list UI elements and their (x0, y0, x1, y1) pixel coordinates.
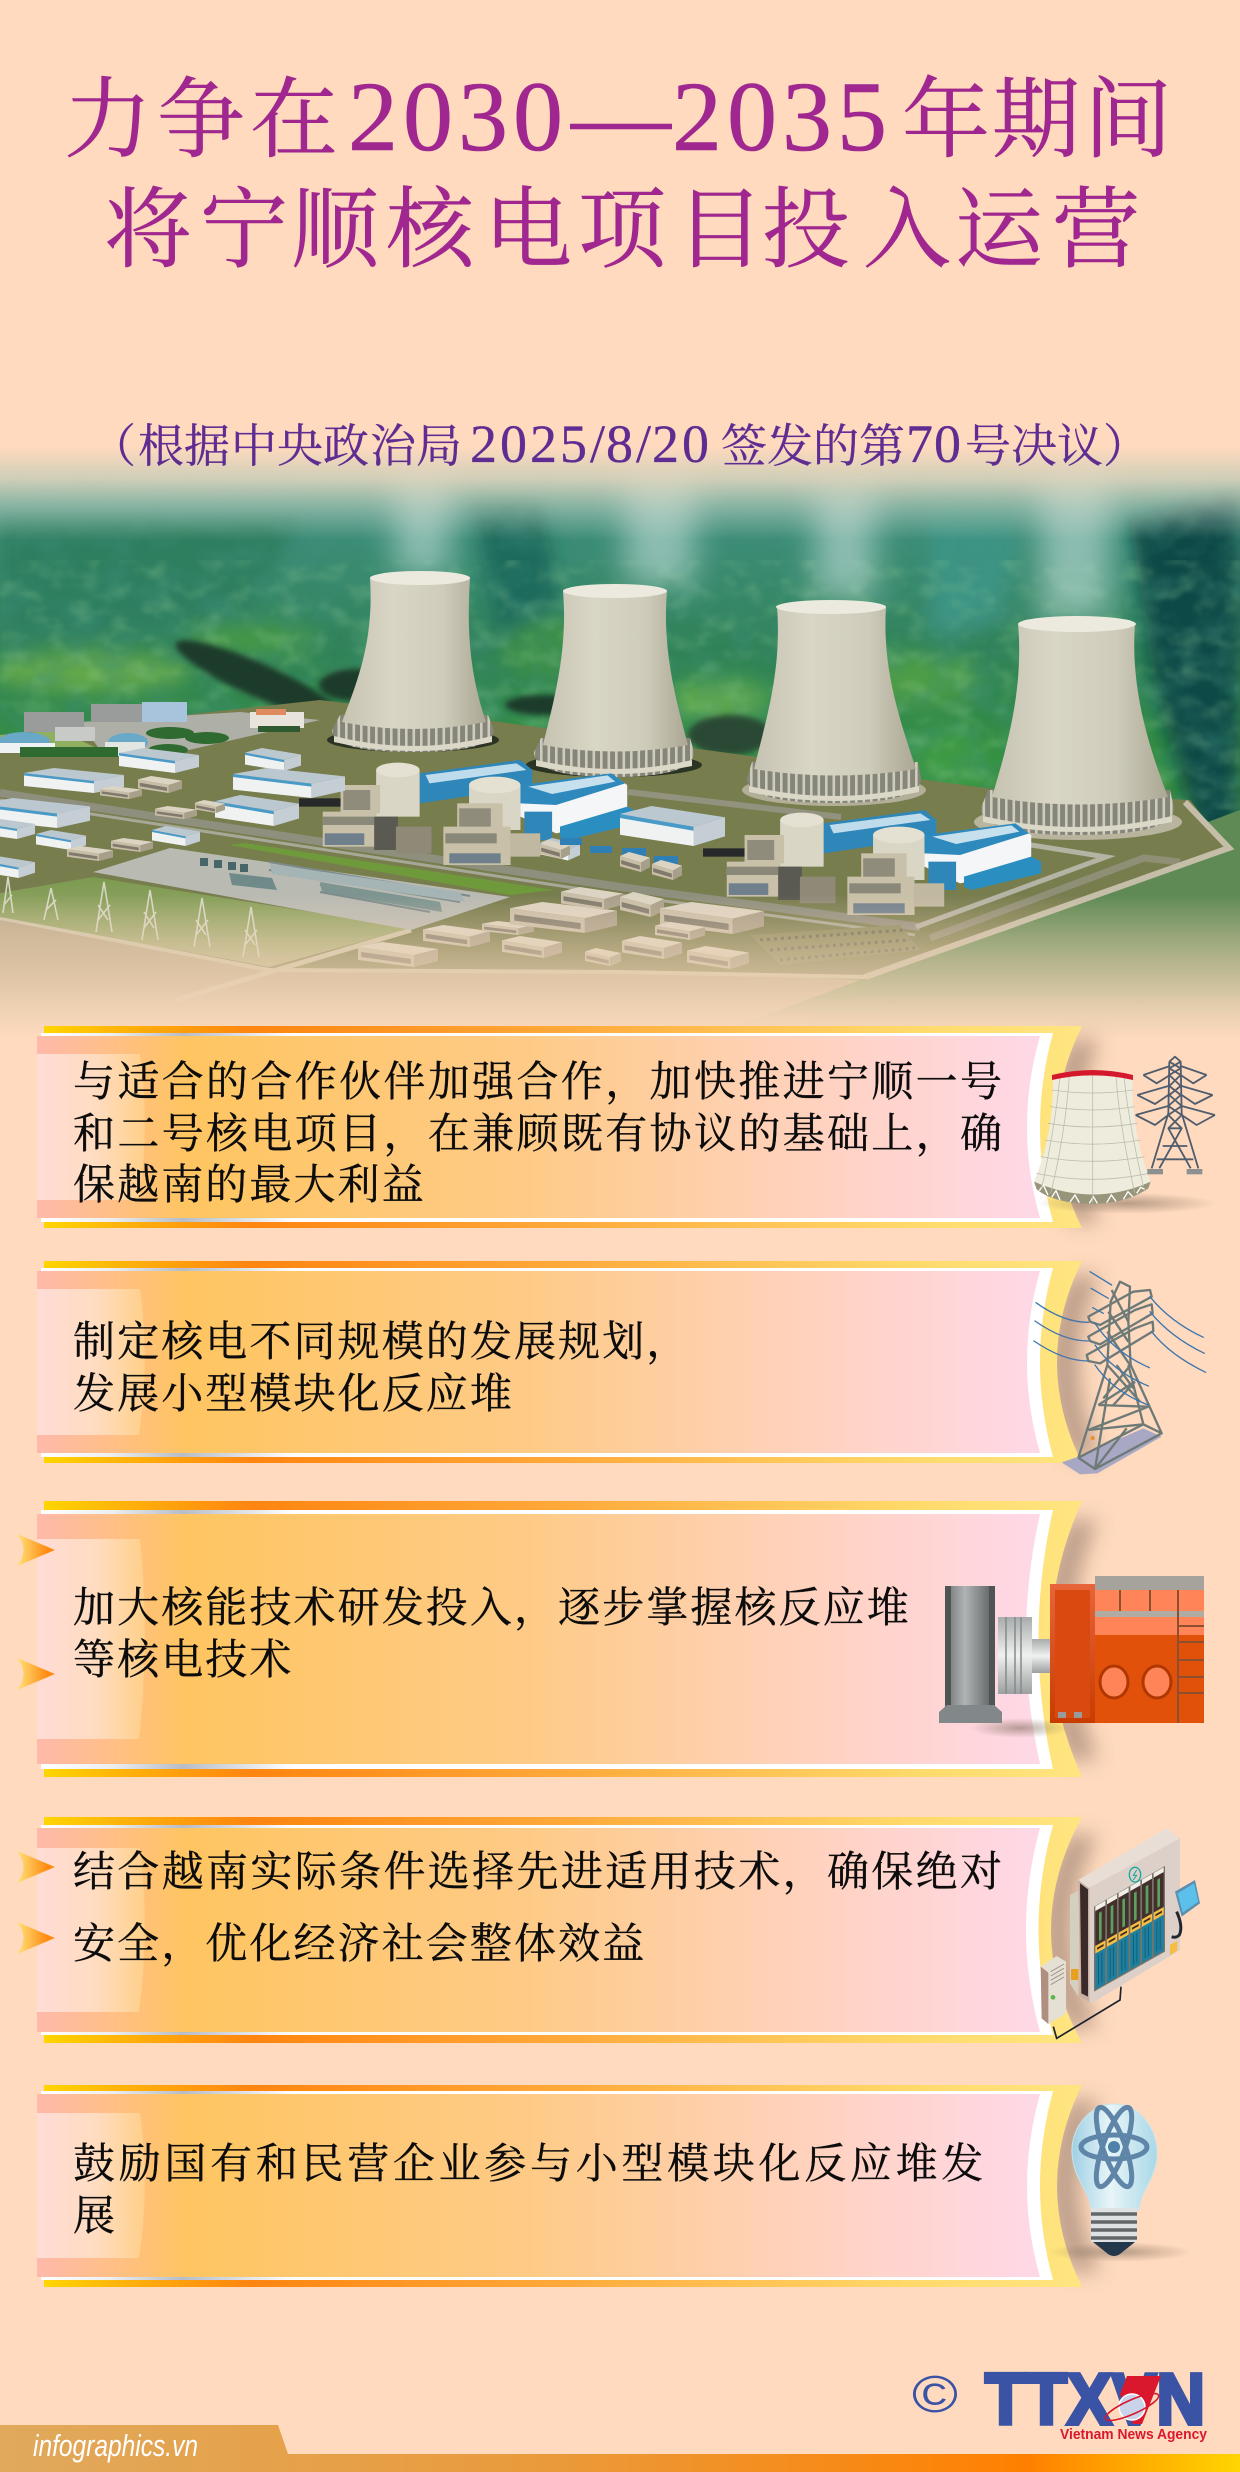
panel 3 text: 等核电技术 (73, 1627, 294, 1687)
lower left slope (0, 917, 860, 1008)
plant ground (0, 700, 1229, 977)
panel 2 text (73, 1309, 690, 1421)
title: 力争在 (64, 50, 338, 176)
icon: generator (939, 1576, 1204, 1738)
reactor buildings (703, 810, 1041, 915)
panel 4 text (73, 1839, 1004, 1971)
title (64, 50, 1172, 286)
panel 3 text: 加大核能技术研发投入，逐步掌握核反应堆 (73, 1575, 911, 1635)
icon: atom light bulb (1048, 2104, 1192, 2262)
panel 4 text: 安全，优化经济社会整体效益 (73, 1911, 646, 1971)
cooling towers (327, 571, 1182, 840)
subtitle: 2025/8/20 (470, 414, 709, 474)
panel 1 (37, 1026, 1217, 1228)
footer bar (0, 2425, 1240, 2472)
subtitle: （根据中央政治局 (90, 410, 462, 476)
icon: cooling tower and pylon (1034, 1057, 1217, 1214)
subtitle: 签发的第 (721, 410, 905, 476)
arrow bullets (17, 1851, 55, 1954)
panel 5 text (73, 2131, 987, 2243)
footer site label: infographics.vn (33, 2428, 198, 2463)
panel 2 (37, 1261, 1206, 1474)
hero image: nuclear power plant (0, 430, 1240, 1040)
subtitle: 70 (906, 414, 961, 474)
campus buildings (0, 702, 725, 880)
panel 4 (17, 1817, 1200, 2043)
transmission pylons (3, 877, 259, 957)
storage blocks (358, 887, 920, 969)
panel 5 (37, 2085, 1192, 2287)
switchyard and lower field (0, 848, 510, 967)
icon: control cabinet (1041, 1828, 1200, 2038)
panel 5 text: 鼓励国有和民营企业参与小型模块化反应堆发 (73, 2131, 987, 2191)
icon: transmission tower (1034, 1272, 1206, 1474)
title: 2030—2035 (348, 61, 887, 172)
panel 3 text (73, 1575, 911, 1687)
panel 1 text: 和二号核电项目，在兼顾既有协议的基础上，确 (73, 1101, 1004, 1161)
title: 年期间 (902, 50, 1172, 176)
panel 4 text: 结合越南实际条件选择先进适用技术，确保绝对 (73, 1839, 1004, 1899)
panel 2 text: 制定核电不同规模的发展规划， (73, 1309, 690, 1369)
agency logo: © (912, 2366, 958, 2424)
panel 1 text: 与适合的合作伙伴加强合作，加快推进宁顺一号 (73, 1049, 1004, 1109)
title: 将宁顺核电项目投入运营 (104, 160, 1140, 286)
lower right slope (1043, 810, 1240, 918)
agency logo (912, 2360, 1208, 2443)
panel 1 text: 保越南的最大利益 (73, 1152, 426, 1212)
subtitle: 号决议） (965, 410, 1149, 476)
agency logo: Vietnam News Agency (1060, 2426, 1208, 2443)
panel 1 text (73, 1049, 1004, 1212)
panel 2 text: 发展小型模块化反应堆 (73, 1361, 514, 1421)
pavements and roads (0, 712, 1229, 1000)
arrow bullets (17, 1534, 55, 1690)
agency logo: TTXVN (985, 2360, 1205, 2440)
panel 5 text: 展 (73, 2183, 117, 2243)
steam plumes (395, 470, 1110, 620)
panel 3 (17, 1501, 1204, 1777)
